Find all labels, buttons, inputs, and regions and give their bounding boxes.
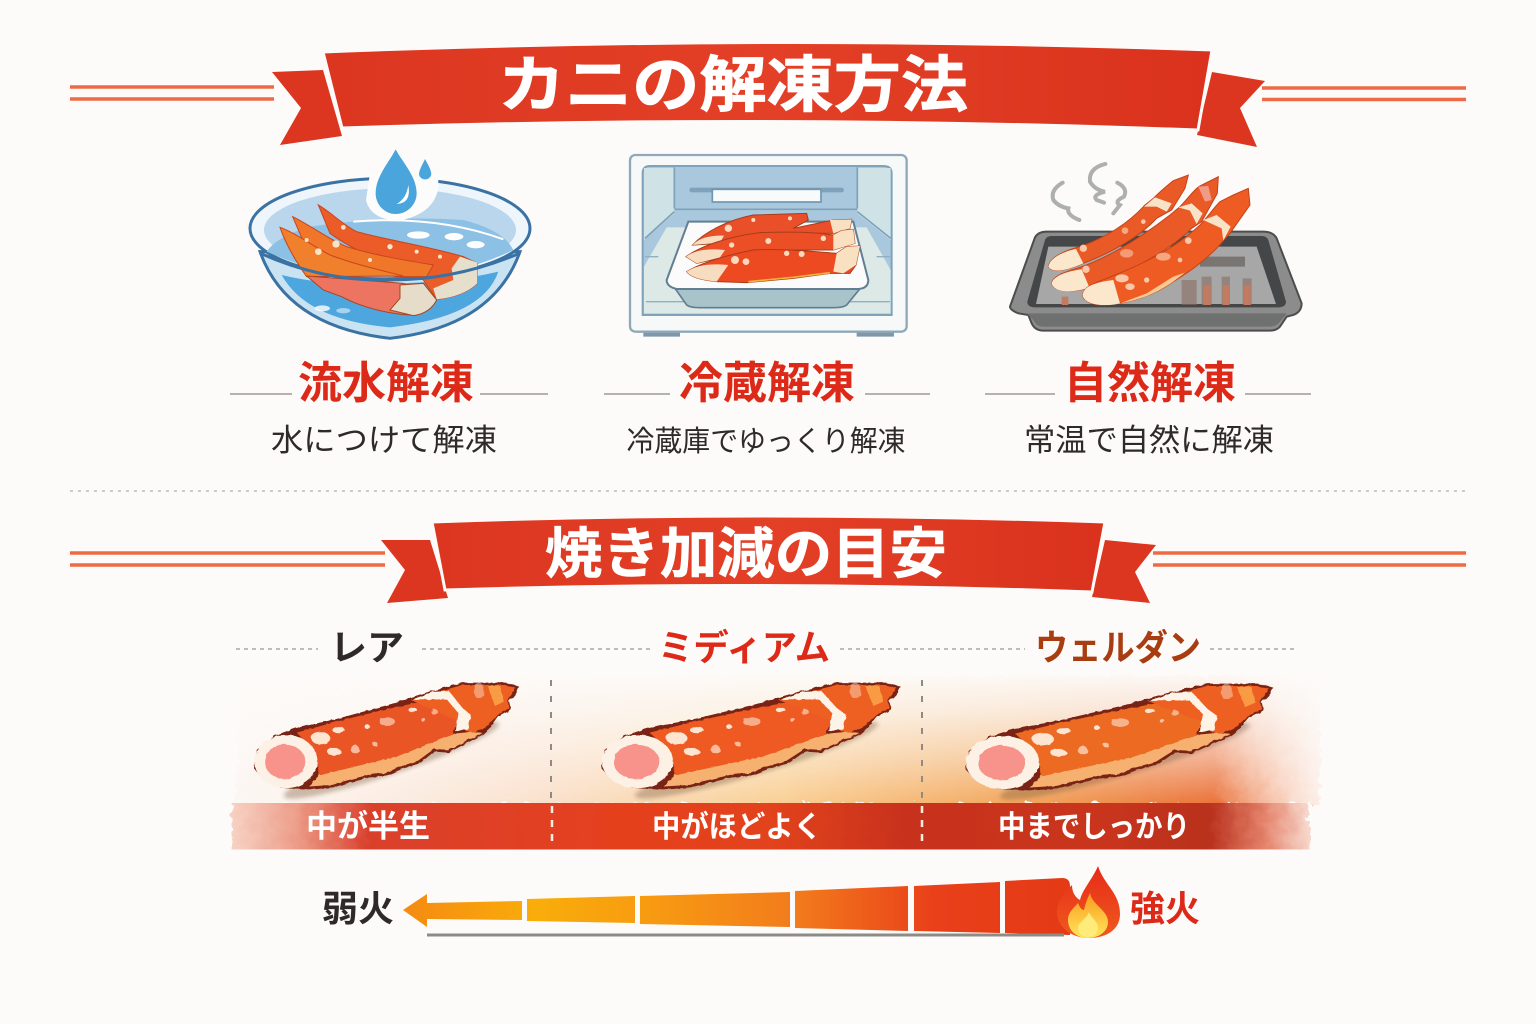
heading: refrigerator: 冷蔵解凍 bbox=[679, 359, 855, 408]
doneness bar bbox=[230, 803, 1314, 850]
method: running water bbox=[230, 149, 548, 458]
heat glow background bbox=[235, 675, 1320, 805]
panel: doneness guide bbox=[70, 516, 1466, 938]
crab leg: rare bbox=[254, 683, 519, 809]
description: running water: 水につけて解凍 bbox=[271, 423, 497, 458]
label: high heat: 強火 bbox=[1130, 888, 1200, 929]
bar text: rare: 中が半生 bbox=[306, 809, 430, 844]
infographic bbox=[70, 44, 1466, 938]
icon: glass bowl with crab in water bbox=[250, 149, 530, 338]
title banner: thawing: カニの解凍方法 bbox=[498, 51, 968, 119]
label: well done: ウェルダン bbox=[1035, 627, 1201, 668]
bar text: well done: 中までしっかり bbox=[998, 811, 1190, 844]
bar text: medium: 中がほどよく bbox=[652, 810, 822, 844]
description: refrigerator: 冷蔵庫でゆっくり解凍 bbox=[626, 425, 906, 458]
icon: refrigerator with crab tray bbox=[630, 155, 907, 337]
title banner: doneness bbox=[70, 516, 1466, 603]
method: natural bbox=[985, 164, 1311, 458]
arrow: heat gradient bbox=[403, 878, 1070, 935]
crab leg: medium bbox=[601, 683, 901, 809]
label: rare: レア bbox=[330, 627, 404, 668]
heading: natural: 自然解凍 bbox=[1064, 359, 1236, 408]
heat scale bbox=[322, 866, 1200, 938]
crab leg: well done bbox=[965, 684, 1273, 810]
method: refrigerator bbox=[604, 155, 930, 458]
icon: flame bbox=[1057, 866, 1120, 938]
panel: thawing methods bbox=[70, 42, 1466, 458]
title banner: thawing bbox=[70, 42, 1466, 147]
description: natural: 常温で自然に解凍 bbox=[1024, 423, 1274, 458]
title banner: doneness: 焼き加減の目安 bbox=[545, 523, 947, 585]
label: low heat: 弱火 bbox=[322, 888, 394, 929]
heading: running water: 流水解凍 bbox=[298, 359, 474, 408]
icon: crab on metal tray with steam bbox=[1010, 164, 1302, 331]
label: medium: ミディアム bbox=[658, 627, 830, 668]
